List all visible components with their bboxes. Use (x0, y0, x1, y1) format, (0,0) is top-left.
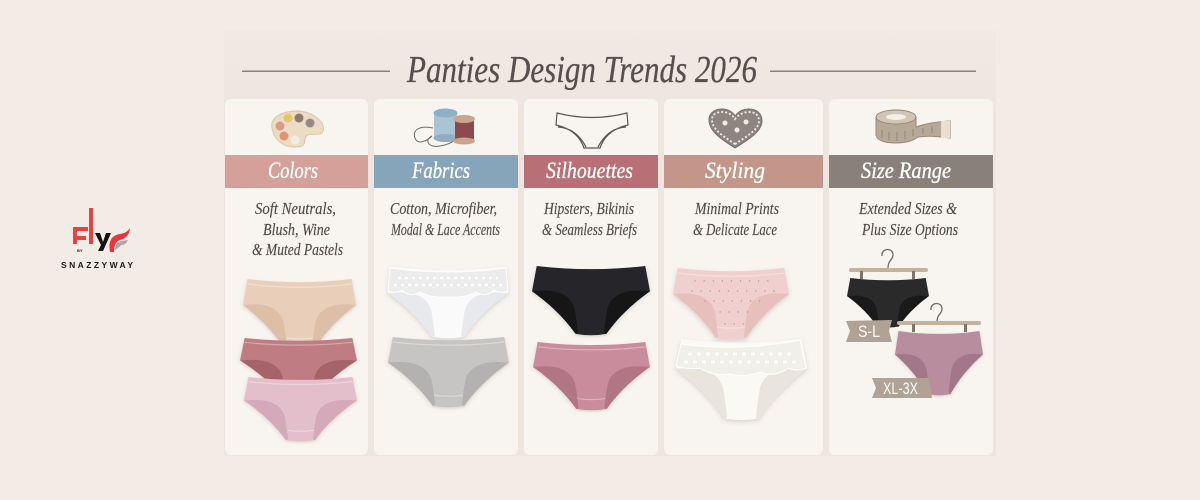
icon: lace heart (709, 109, 762, 148)
panel: styling (664, 99, 823, 455)
description: silhouettes (542, 199, 637, 239)
logo: Fly by Snazzyway: SNAZZYWAY (61, 260, 133, 270)
hanger with mauve panty (895, 303, 983, 395)
banner: fabrics: Fabrics (411, 158, 470, 183)
panty: pink dotted (673, 268, 789, 339)
description: size range: Plus Size Options (861, 220, 958, 239)
panty: beige (243, 279, 356, 350)
icon: measuring tape (876, 110, 950, 143)
description: styling (693, 199, 779, 239)
header panel (224, 30, 996, 456)
panel: colors (225, 99, 368, 455)
size tag: XL-3X: XL-3X (883, 379, 918, 398)
description: silhouettes: & Seamless Briefs (542, 220, 637, 239)
panel: fabrics (374, 99, 518, 455)
panty: pink (244, 377, 357, 441)
hanger with black panty (847, 249, 929, 328)
description: fabrics (390, 199, 500, 239)
panty: grey (388, 337, 509, 407)
logo: Fly by Snazzyway (61, 208, 133, 270)
description: styling: & Delicate Lace (693, 220, 777, 239)
panel: silhouettes (524, 99, 658, 455)
panty: white lace (676, 339, 807, 420)
description: colors: Soft Neutrals, (255, 199, 336, 218)
panty: mauve (533, 342, 650, 410)
banner: styling: Styling (705, 158, 765, 183)
banner: colors (225, 155, 368, 188)
description: size range (858, 199, 958, 239)
icon: thread spools (414, 108, 475, 146)
description: colors: & Muted Pastels (252, 240, 343, 259)
description: colors (252, 199, 343, 259)
banner: colors: Colors (268, 158, 318, 183)
description: styling: Minimal Prints (694, 199, 779, 218)
banner: styling (664, 155, 823, 188)
size tag: S-L (846, 320, 892, 342)
description: silhouettes: Hipsters, Bikinis (543, 199, 634, 218)
title: Panties Design Trends 2026 (406, 49, 757, 91)
description: size range: Extended Sizes & (858, 199, 957, 218)
description: colors: Blush, Wine (263, 220, 330, 239)
logo: Fly by Snazzyway: BY (77, 248, 83, 253)
panty: rose (240, 338, 357, 399)
description: fabrics: Modal & Lace Accents (390, 220, 500, 239)
icon: paint palette (272, 111, 323, 147)
panel: size range (829, 99, 993, 455)
description: fabrics: Cotton, Microfiber, (390, 199, 497, 218)
banner: fabrics (374, 155, 518, 188)
banner: size range (829, 155, 993, 188)
banner: size range: Size Range (861, 158, 951, 183)
banner: silhouettes (524, 155, 658, 188)
size tag: S-L: S-L (858, 322, 880, 341)
banner: silhouettes: Silhouettes (546, 158, 633, 183)
panty: white lace (388, 267, 508, 338)
icon: brief outline (556, 113, 628, 148)
panty: black (532, 266, 650, 335)
